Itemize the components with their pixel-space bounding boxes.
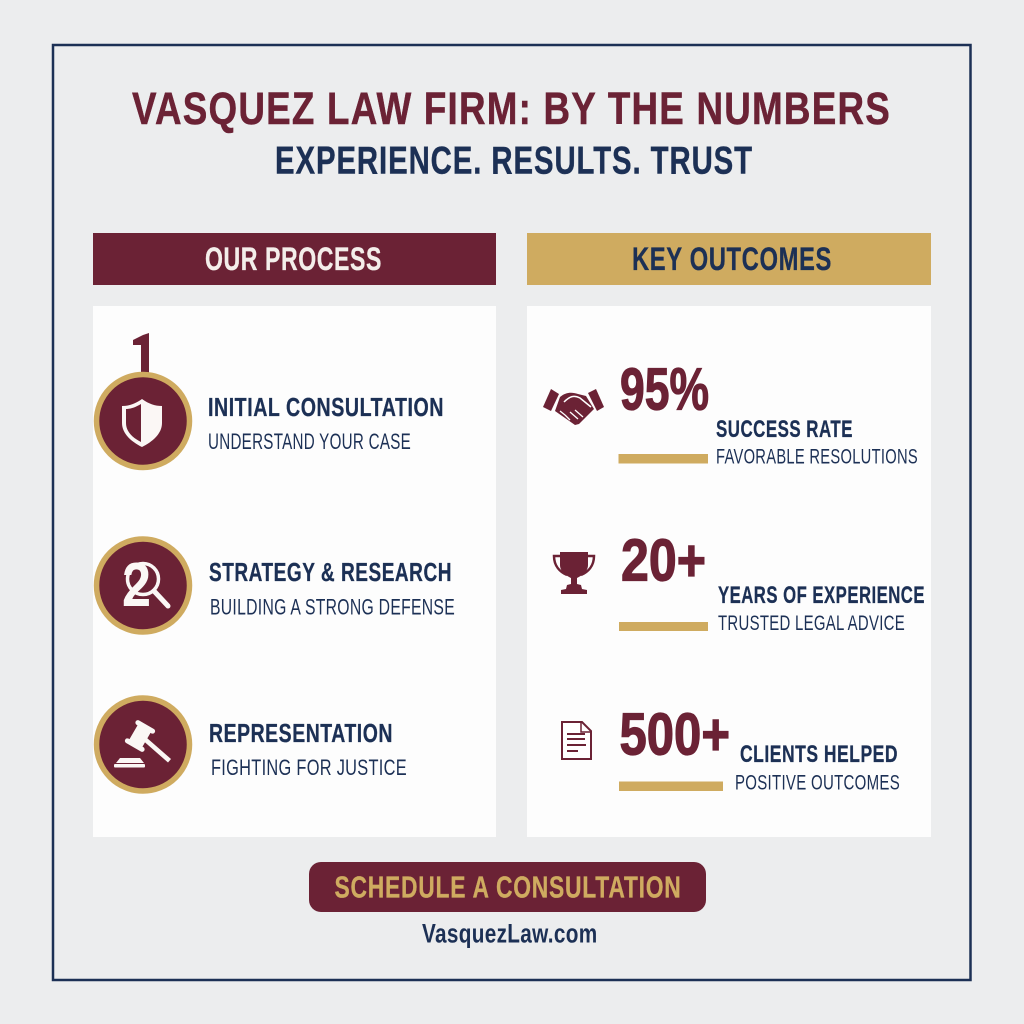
icon: gavel badge [96,698,190,791]
panel: our process [93,306,496,837]
numeral 2: 2 [122,551,151,620]
value 95%: 95% [620,356,709,422]
description: FAVORABLE RESOLUTIONS [716,446,918,468]
icon: handshake [543,389,604,425]
step 1 description: UNDERSTAND YOUR CASE [208,429,411,454]
button: schedule a consultation [309,862,706,912]
step 2 description: BUILDING A STRONG DEFENSE [210,594,455,620]
step 2: strategy and research [96,539,455,632]
stat: success rate [543,356,918,468]
icon: trophy [554,552,594,594]
step 3 heading: REPRESENTATION [209,720,393,748]
heading: our process: OUR PROCESS [205,241,382,277]
icon: shield badge [96,374,190,468]
step 2 heading: STRATEGY & RESEARCH [209,559,452,587]
label: SUCCESS RATE [716,416,853,443]
heading: key outcomes: KEY OUTCOMES [632,241,832,277]
stat: years of experience [554,528,925,635]
description: POSITIVE OUTCOMES [735,772,900,794]
label: CLIENTS HELPED [740,741,898,768]
stat: clients helped [562,702,900,794]
heading: our process [93,233,496,285]
icon: document [562,722,591,759]
button: schedule a consultation: SCHEDULE A CONSULTATION [334,870,682,904]
icon: magnifier badge [96,539,190,632]
step 3: representation [96,698,407,791]
gold bar [618,454,708,464]
subtitle: EXPERIENCE. RESULTS. TRUST [275,140,753,182]
step 3 description: FIGHTING FOR JUSTICE [211,755,407,780]
step 1 heading: INITIAL CONSULTATION [208,394,444,422]
website url: VasquezLaw.com [422,918,598,948]
value 500+: 500+ [620,702,730,768]
heading: key outcomes [527,233,931,285]
panel: key outcomes [527,306,931,837]
numeral 1 [133,333,149,376]
step 1: initial consultation [96,333,444,468]
gold bar [619,622,708,631]
label: YEARS OF EXPERIENCE [718,582,925,609]
value 20+: 20+ [621,528,706,594]
description: TRUSTED LEGAL ADVICE [718,612,905,635]
gold bar [619,782,723,791]
